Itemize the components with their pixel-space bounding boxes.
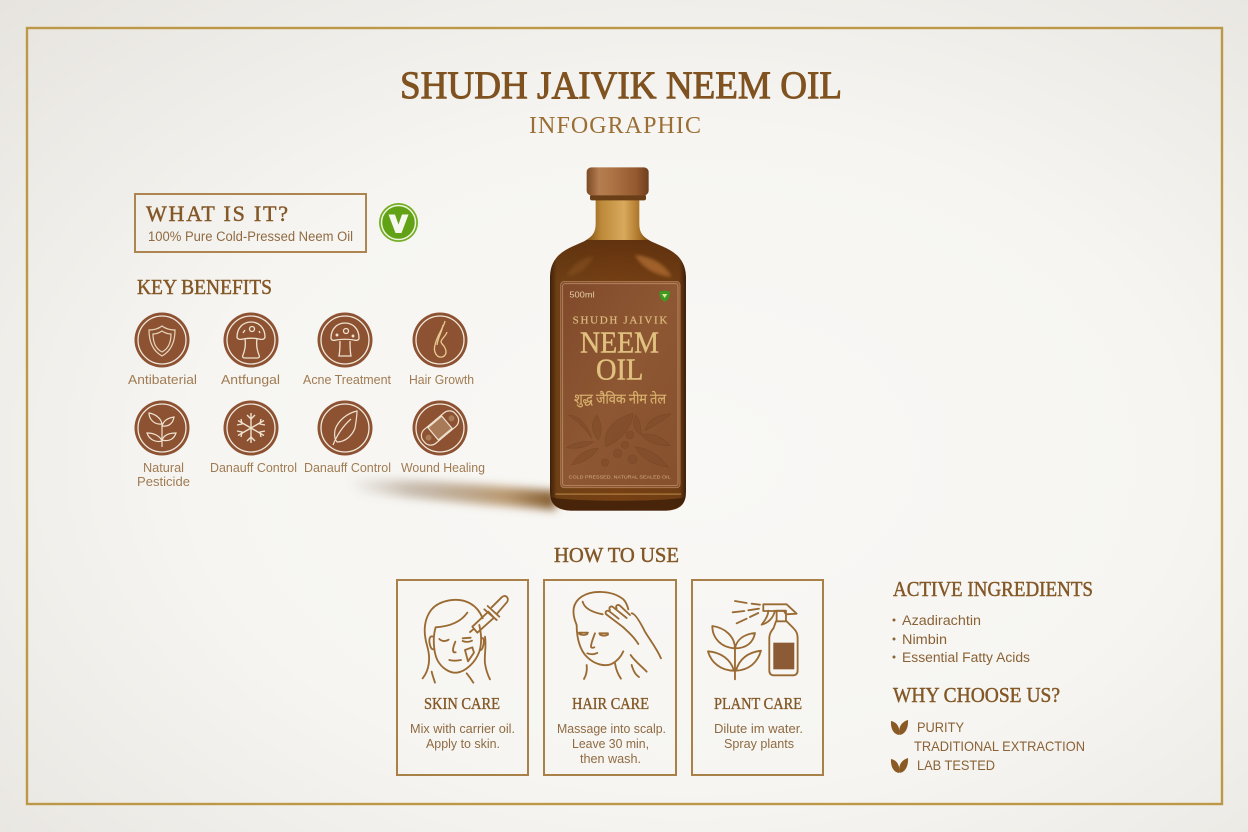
benefit: acne treatment	[303, 312, 392, 387]
bottle collar	[590, 195, 646, 200]
bottle shoulder shade	[550, 240, 686, 283]
hair care description: then wash.	[580, 751, 641, 766]
label oil: OIL	[596, 352, 643, 386]
bottle base glass	[551, 495, 686, 511]
panel: key benefits	[128, 312, 485, 489]
label neem leaves	[567, 413, 671, 467]
skin care description: Mix with carrier oil.	[410, 721, 515, 736]
benefit: antibacterial	[128, 312, 197, 387]
benefit: dandruff control leaf	[304, 400, 391, 475]
why choose us heading: WHY CHOOSE US?	[893, 683, 1060, 707]
label neem: NEEM	[580, 326, 659, 360]
ingredient list	[892, 613, 1030, 665]
benefit: wound healing	[401, 400, 485, 475]
plant care title: PLANT CARE	[714, 694, 802, 713]
bottle shadow	[347, 479, 556, 510]
benefit: dandruff control snowflake	[210, 400, 297, 475]
ingredient list: Azadirachtin	[902, 613, 981, 628]
bottle neck	[585, 200, 650, 241]
subtitle: INFOGRAPHIC	[529, 113, 701, 139]
plant care description	[714, 721, 803, 751]
hair care description: Leave 30 min,	[572, 736, 649, 751]
benefit: dandruff control snowflake: Danauff Control	[210, 461, 297, 475]
how to use heading: HOW TO USE	[554, 543, 679, 567]
hair care description	[557, 721, 666, 766]
card: plant care	[692, 580, 823, 775]
ingredient list: Essential Fatty Acids	[902, 650, 1030, 665]
skin care description	[410, 721, 515, 751]
benefit: antifungal: Antfungal	[221, 373, 280, 387]
ingredient list: Nimbin	[902, 632, 947, 647]
panel: what is it	[135, 194, 366, 252]
hair care title: HAIR CARE	[572, 694, 649, 713]
benefit: hair growth	[409, 312, 474, 387]
icon: head massage	[573, 592, 661, 679]
bottle cap	[587, 167, 649, 195]
label badge	[659, 290, 670, 302]
purity: PURITY	[917, 719, 965, 735]
panel: why choose us	[891, 683, 1085, 773]
icon: leaf bullet	[891, 720, 908, 735]
plant care description: Spray plants	[724, 736, 794, 751]
benefit: acne treatment: Acne Treatment	[303, 373, 392, 387]
traditional extraction: TRADITIONAL EXTRACTION	[914, 738, 1085, 754]
product label	[561, 282, 680, 488]
bottle	[550, 167, 686, 511]
bottle shoulder highlight	[635, 255, 672, 277]
benefit: dandruff control leaf: Danauff Control	[304, 461, 391, 475]
benefit: natural pesticide: Natural	[143, 461, 184, 475]
icon: green check badge	[379, 203, 418, 242]
hair care description: Massage into scalp.	[557, 721, 666, 736]
icon: leaf bullet two	[891, 758, 908, 773]
what is it description: 100% Pure Cold-Pressed Neem Oil	[148, 229, 353, 244]
benefit: natural pesticide	[134, 400, 190, 489]
icon: face with dropper	[423, 596, 508, 683]
label hindi line: शुद्ध जैविक नीम तेल	[574, 390, 666, 407]
label volume: 500ml	[569, 291, 595, 300]
benefit: natural pesticide: Pesticide	[137, 475, 190, 489]
key benefits heading: KEY BENEFITS	[137, 275, 272, 299]
title: SHUDH JAIVIK NEEM OIL	[400, 64, 842, 107]
active ingredients heading: ACTIVE INGREDIENTS	[893, 577, 1093, 601]
benefit: wound healing: Wound Healing	[401, 461, 485, 475]
label brand: SHUDH JAIVIK	[573, 314, 667, 326]
what is it heading: WHAT IS IT?	[146, 201, 288, 226]
panel: active ingredients	[892, 577, 1093, 665]
bottle body	[550, 240, 686, 511]
plant care description: Dilute im water.	[714, 721, 803, 736]
benefit: antifungal	[221, 312, 280, 387]
lab tested: LAB TESTED	[917, 757, 995, 773]
label footer: COLD PRESSED. NATURAL SEALED OIL	[569, 475, 671, 481]
icon: plant and spray bottle	[708, 601, 798, 679]
skin care title: SKIN CARE	[424, 694, 500, 713]
card: hair care	[544, 580, 676, 775]
benefit: antibacterial: Antibaterial	[128, 373, 197, 387]
skin care description: Apply to skin.	[426, 736, 500, 751]
benefit: hair growth: Hair Growth	[409, 373, 474, 387]
card: skin care	[397, 580, 528, 775]
